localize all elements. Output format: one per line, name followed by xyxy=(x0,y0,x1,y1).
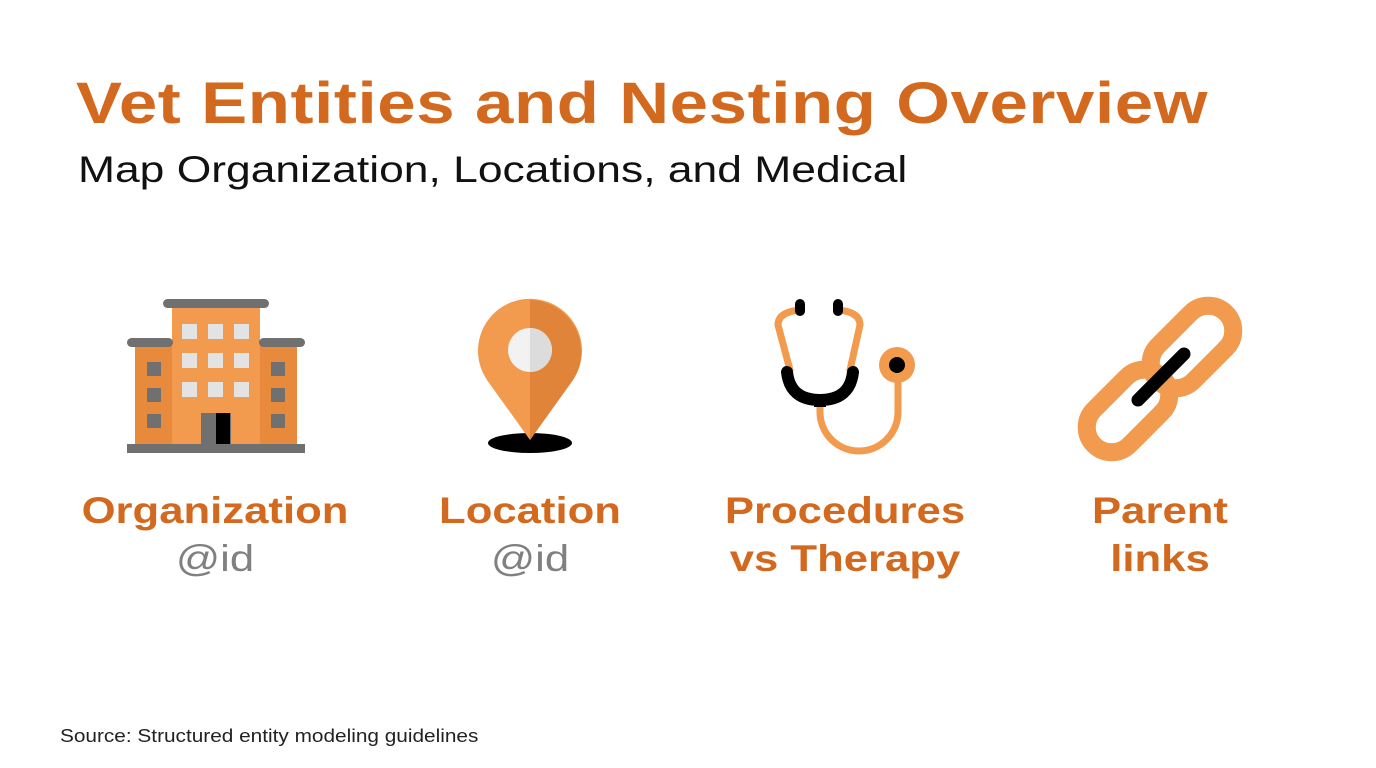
label: Procedures vs Therapy xyxy=(725,490,965,579)
label: Organization xyxy=(82,490,348,579)
icon: building xyxy=(127,299,305,453)
label: Parent links: links xyxy=(1110,538,1210,579)
icon: location pin xyxy=(478,299,582,453)
label: Organization: Organization xyxy=(82,490,348,531)
label: Parent links: Parent xyxy=(1092,490,1228,531)
label: Location: Location xyxy=(439,490,621,531)
label: Location: @id xyxy=(491,538,569,579)
source note: Source: Structured entity modeling guidelines xyxy=(60,726,478,746)
title: Vet Entities and Nesting Overview xyxy=(76,71,1208,136)
subtitle: Map Organization, Locations, and Medical xyxy=(78,149,907,190)
label: Location xyxy=(439,490,621,579)
label: Organization: @id xyxy=(176,538,254,579)
icon: stethoscope xyxy=(778,304,915,451)
icon: chain link xyxy=(1076,295,1244,463)
label: Parent links xyxy=(1092,490,1228,579)
label: Procedures vs Therapy: vs Therapy xyxy=(730,538,960,579)
label: Procedures vs Therapy: Procedures xyxy=(725,490,965,531)
